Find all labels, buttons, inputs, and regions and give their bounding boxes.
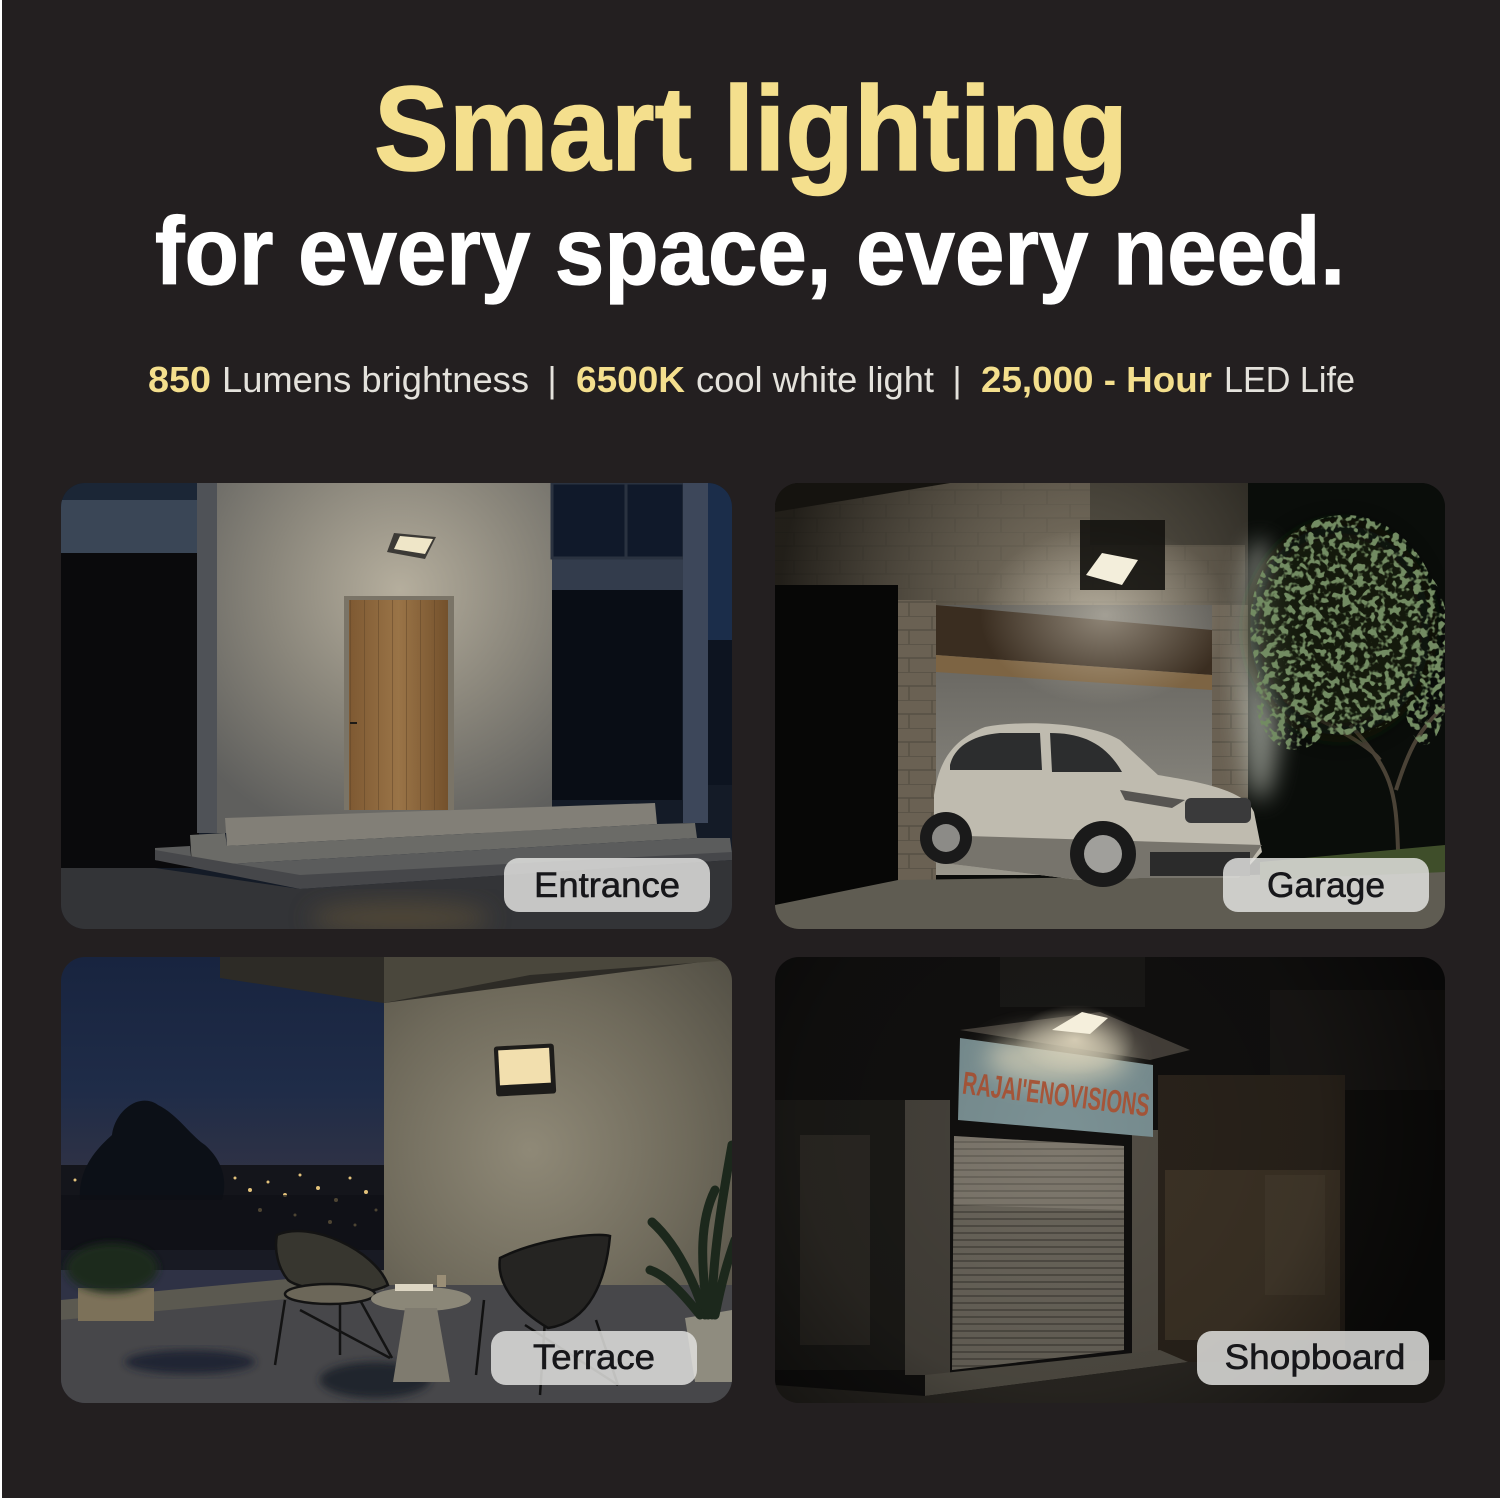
right night area — [1248, 483, 1445, 863]
specs line: cool white light — [696, 359, 934, 400]
signboard — [958, 1032, 1153, 1137]
lamp — [1015, 1005, 1135, 1075]
label: terrace — [491, 1331, 697, 1385]
specs line: 25,000 - Hour — [981, 359, 1212, 400]
wall — [384, 957, 732, 1287]
label: shopboard — [1197, 1331, 1429, 1385]
tree — [1250, 515, 1450, 850]
vignette — [775, 957, 1445, 1403]
door frame — [344, 596, 454, 810]
panel: entrance — [61, 483, 732, 934]
left shop door — [800, 1135, 870, 1345]
glow near lamp — [992, 540, 1215, 692]
ground — [775, 870, 1445, 929]
lamp — [387, 533, 436, 559]
stone pillars — [898, 600, 936, 896]
specs line: | — [547, 359, 557, 400]
garage inside — [936, 605, 1212, 875]
specs line — [148, 359, 1355, 400]
right shop — [1158, 1075, 1345, 1365]
panel: shopboard — [775, 957, 1445, 1403]
label: entrance: Entrance — [534, 866, 680, 905]
signboard: RAJAI'ENOVISIONS — [961, 1065, 1152, 1123]
panel: garage — [775, 483, 1450, 929]
left planter — [78, 1288, 154, 1321]
shutter — [952, 1136, 1124, 1370]
lamp — [1080, 520, 1165, 590]
heading line 2: for every space, every need. — [155, 198, 1345, 305]
left building — [62, 483, 197, 500]
stone wall — [775, 483, 1245, 605]
wall — [197, 483, 552, 833]
tree silhouette — [80, 1101, 224, 1200]
title — [155, 62, 1345, 305]
label: terrace: Terrace — [533, 1338, 655, 1377]
chair right — [476, 1235, 618, 1395]
steps — [225, 803, 657, 846]
specs line: LED Life — [1224, 359, 1355, 400]
sill — [925, 1350, 1188, 1396]
label: shopboard: Shopboard — [1224, 1338, 1406, 1377]
table — [371, 1275, 471, 1382]
specs line: 6500K — [576, 359, 685, 400]
specs line: Lumens brightness — [222, 359, 529, 400]
car — [920, 723, 1262, 887]
lamp — [494, 1043, 556, 1097]
floor — [61, 1285, 732, 1403]
chair left — [275, 1231, 392, 1365]
right windows — [552, 483, 684, 558]
label: garage: Garage — [1267, 866, 1385, 905]
city lights — [61, 1165, 386, 1250]
panel: terrace — [61, 957, 735, 1403]
specs line: | — [952, 359, 962, 400]
label: garage — [1223, 858, 1429, 912]
specs line: 850 — [148, 359, 211, 400]
label: entrance — [504, 858, 710, 912]
ground — [775, 1360, 1445, 1403]
door — [349, 600, 448, 810]
ground — [61, 860, 732, 929]
roof — [960, 1012, 1190, 1060]
roof — [220, 957, 732, 1003]
building pillars — [905, 1100, 950, 1375]
heading line 1: Smart lighting — [374, 62, 1128, 196]
plant and pot — [650, 1145, 735, 1382]
shadows — [125, 1350, 255, 1374]
